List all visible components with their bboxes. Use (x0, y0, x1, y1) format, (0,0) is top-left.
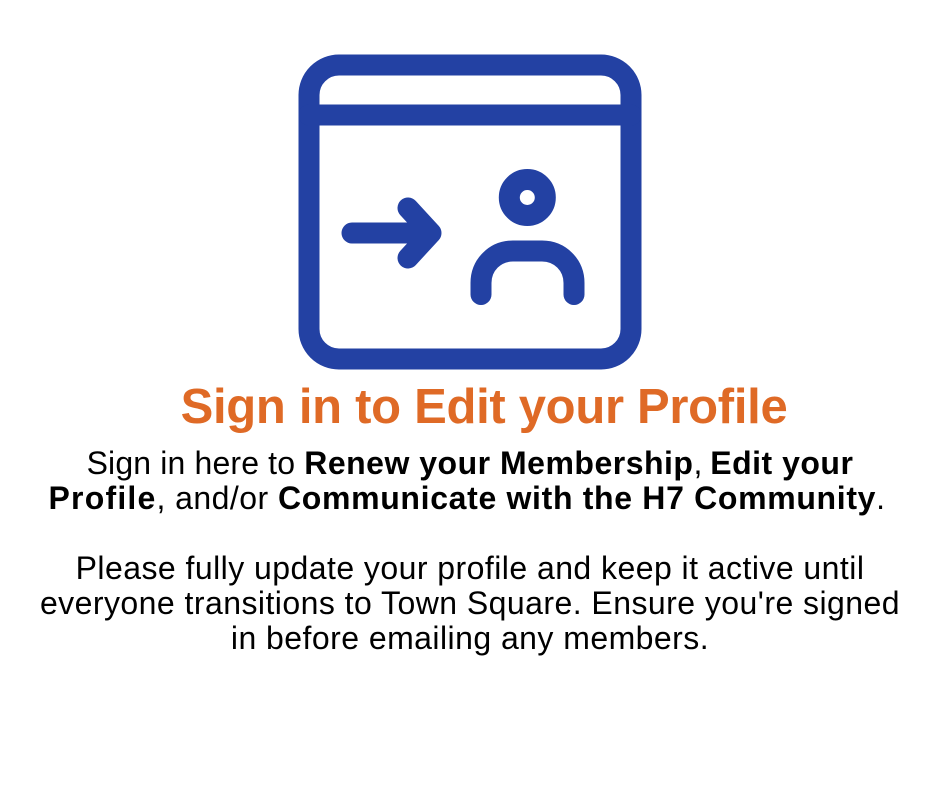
text block: sign in instructions: Sign in here to Renew your Membership, Edit your (87, 445, 853, 481)
icon: browser window with arrow and user (298, 54, 642, 370)
text block: sign in instructions (49, 445, 885, 516)
text block: profile update note: everyone transitions to Town Square. Ensure you're signed (40, 585, 900, 621)
title: Sign in to Edit your Profile (181, 380, 787, 434)
text block: sign in instructions: Profile, and/or Communicate with the H7 Community. (49, 480, 885, 516)
text block: profile update note: in before emailing any members. (231, 620, 709, 656)
text block: profile update note: Please fully update your profile and keep it active until (76, 550, 864, 586)
text block: profile update note (40, 550, 900, 656)
